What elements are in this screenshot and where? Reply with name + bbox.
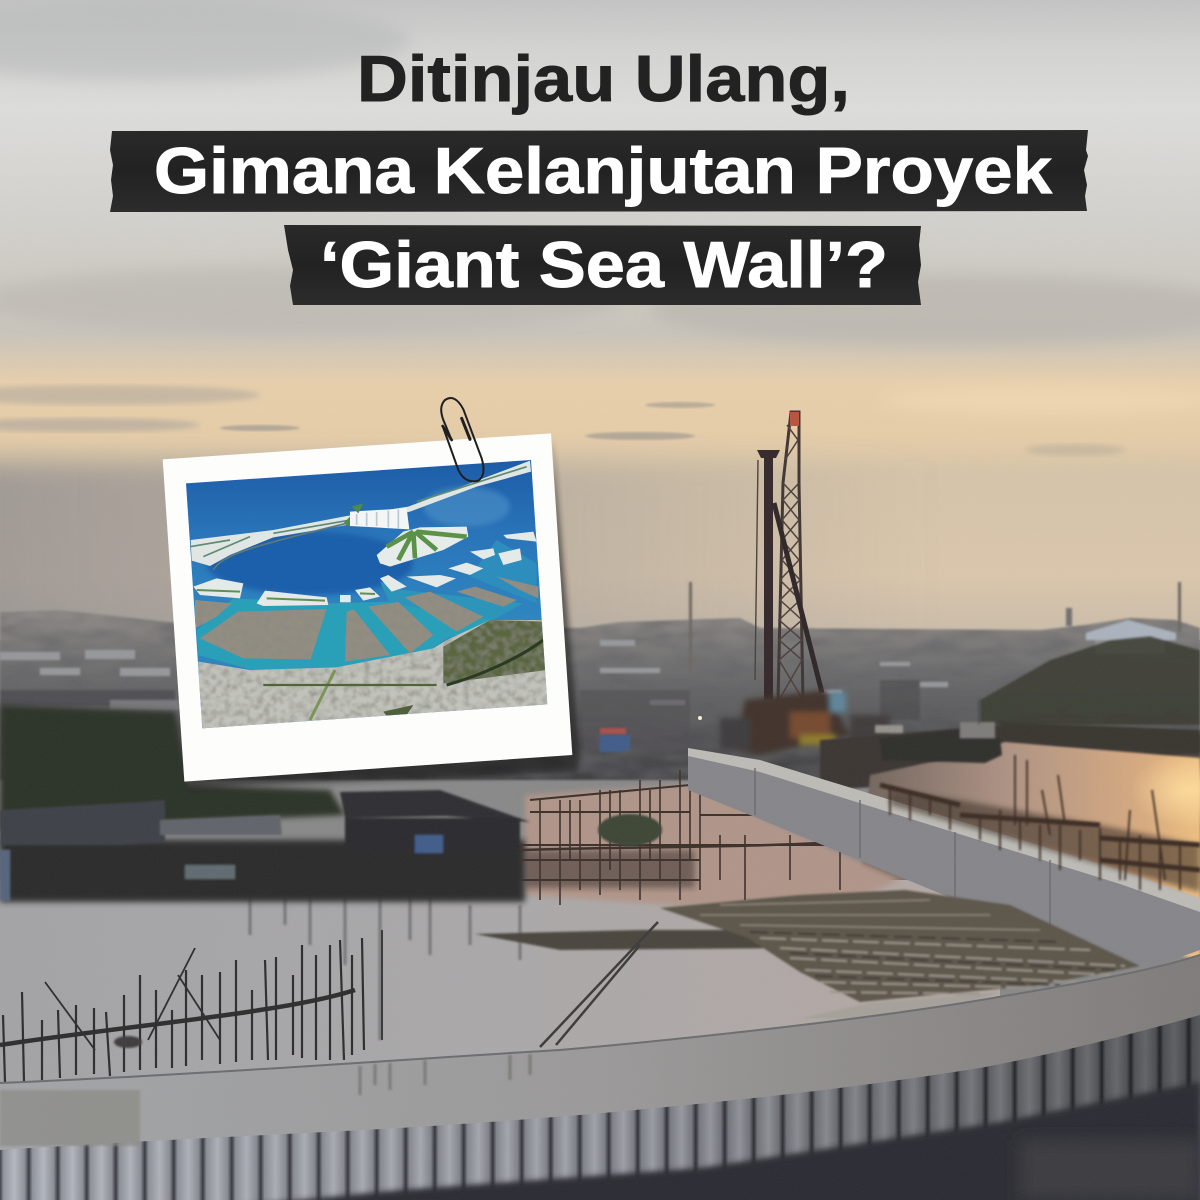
polaroid white frame bbox=[163, 433, 572, 782]
heading line 2: Gimana Kelanjutan Proyek bbox=[154, 134, 1053, 207]
front concrete sea wall bbox=[0, 955, 1200, 1200]
middle pink water area bbox=[525, 785, 900, 915]
sheet piles bbox=[0, 1015, 1200, 1200]
torn tape behind heading line 3 bbox=[284, 225, 921, 305]
dark waterline at foot of wall bbox=[150, 1082, 1200, 1200]
sky bbox=[0, 0, 1200, 652]
sea bbox=[183, 457, 550, 730]
bamboo frames along the wall bbox=[880, 755, 1200, 892]
tugboat and barge bbox=[875, 700, 1200, 763]
heading line 1: Ditinjau Ulang, bbox=[357, 42, 850, 115]
construction machinery on wall bbox=[720, 690, 890, 755]
small offshore islands bbox=[193, 532, 537, 606]
heading line 3: ‘Giant Sea Wall’? bbox=[320, 228, 888, 301]
polaroid shadow bbox=[186, 436, 580, 788]
mangrove trees bbox=[0, 705, 345, 830]
turquoise canals bbox=[197, 598, 493, 669]
built-up coastline bbox=[198, 620, 550, 730]
green district bbox=[443, 620, 547, 683]
pile driver and crawler crane bbox=[755, 412, 822, 700]
stilt houses bbox=[0, 790, 695, 902]
water reflections of houses bbox=[250, 895, 520, 1040]
wall cap bbox=[0, 955, 1200, 1150]
aerial rendering of the Jakarta coast plan bbox=[183, 457, 550, 730]
bamboo scaffolding in middle water bbox=[520, 770, 955, 905]
tarps near wall bbox=[600, 728, 626, 752]
title bbox=[110, 42, 1088, 305]
distant city skyline bbox=[0, 582, 1200, 780]
torn tape behind heading line 2 bbox=[110, 130, 1088, 212]
dark shoreline behind river bbox=[820, 725, 1200, 790]
right river with sun reflection bbox=[860, 742, 1200, 960]
outer island wall strip bbox=[191, 461, 531, 566]
site lights bbox=[698, 716, 888, 760]
bamboo fence in water bbox=[0, 930, 382, 1082]
diagonal poles bbox=[540, 922, 658, 1047]
bamboo raft on the water bbox=[475, 890, 1140, 1020]
lagoon bbox=[207, 532, 413, 595]
left calm water bbox=[0, 880, 1000, 1090]
paperclip bbox=[441, 398, 484, 481]
mainland reclamation blocks bbox=[195, 577, 538, 662]
polaroid photo with master plan aerial bbox=[163, 398, 572, 782]
fan island bbox=[377, 527, 468, 567]
diagonal concrete sea wall bbox=[688, 748, 1200, 968]
